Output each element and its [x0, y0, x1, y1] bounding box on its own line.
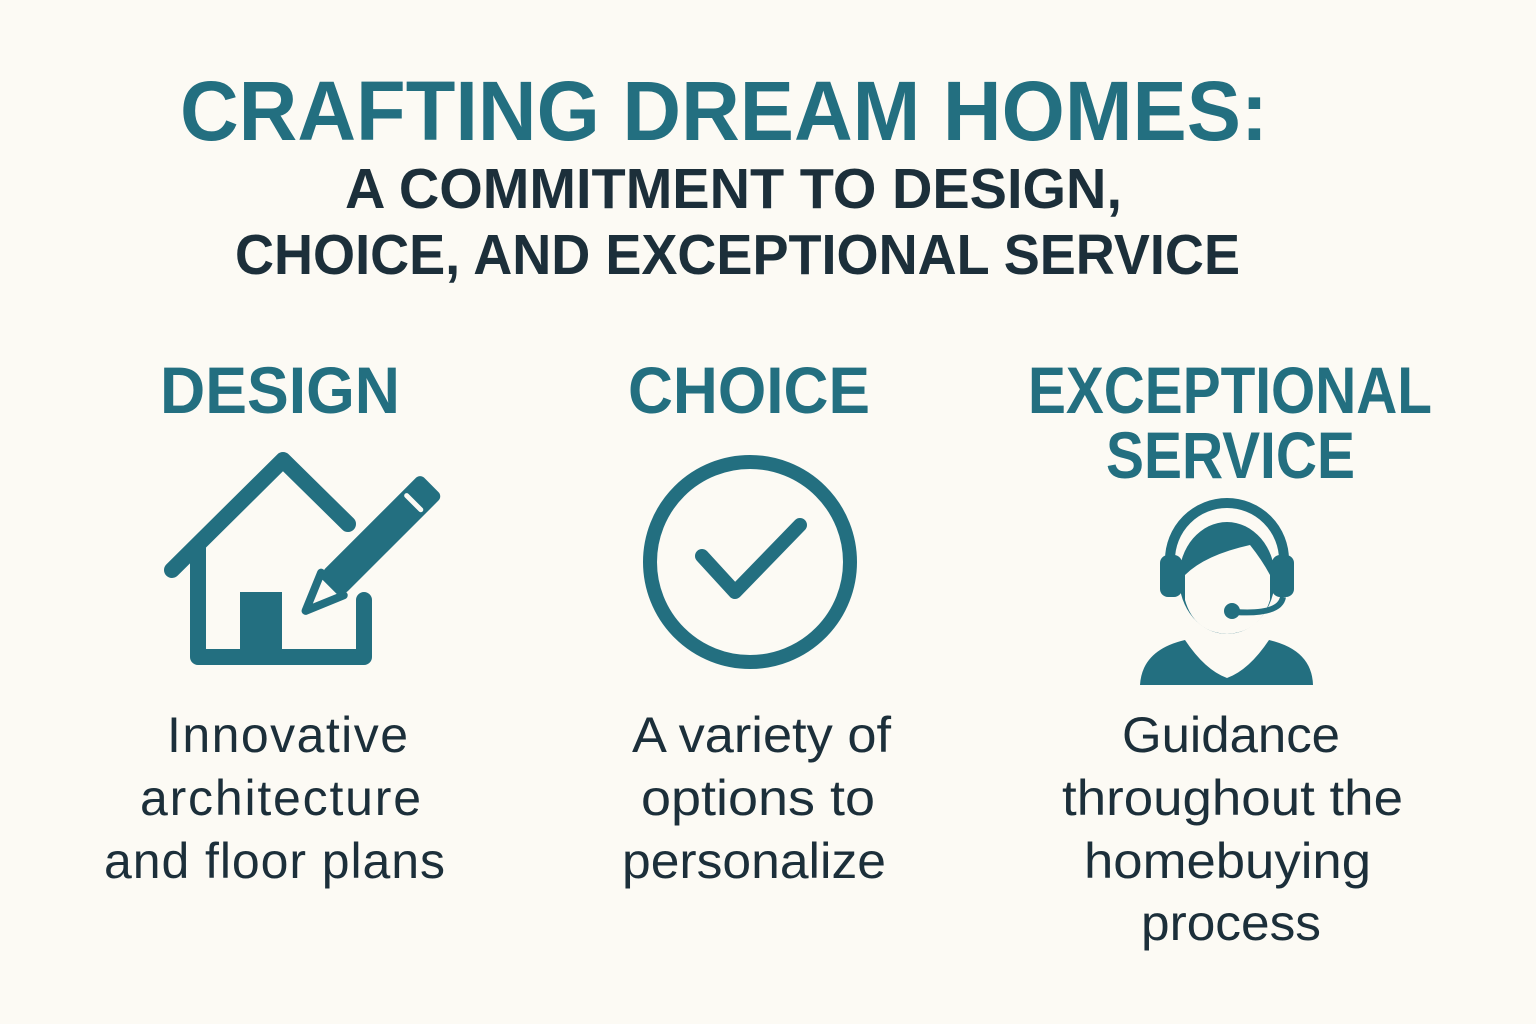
body: design: and floor plans [104, 833, 445, 889]
body: exceptional service: Guidance [1122, 707, 1340, 763]
heading: exceptional service [1028, 353, 1432, 492]
body: choice [622, 707, 891, 889]
body: design: Innovative [167, 707, 408, 763]
subtitle: A COMMITMENT TO DESIGN, [345, 157, 1122, 221]
panel: exceptional service [1028, 353, 1432, 951]
body: exceptional service: throughout the [1062, 770, 1403, 826]
body: choice: options to [641, 770, 875, 826]
body: exceptional service [1062, 707, 1403, 951]
heading: exceptional service: SERVICE [1106, 418, 1355, 492]
body: exceptional service: process [1141, 895, 1321, 951]
panel: design [104, 353, 445, 889]
heading: design: DESIGN [160, 353, 400, 427]
heading: choice: CHOICE [628, 353, 870, 427]
body: choice: personalize [622, 833, 886, 889]
title [180, 64, 1268, 287]
title: CRAFTING DREAM HOMES: [180, 64, 1268, 158]
panel: choice [622, 353, 891, 889]
subtitle [235, 157, 1240, 287]
body: exceptional service: homebuying [1084, 833, 1371, 889]
icon: check circle [650, 462, 850, 662]
body: choice: A variety of [632, 707, 891, 763]
body: design: architecture [140, 770, 421, 826]
icon: house with pencil [172, 460, 443, 657]
body: design [104, 707, 445, 889]
icon: headset person [1140, 503, 1313, 685]
heading: exceptional service: EXCEPTIONAL [1028, 353, 1432, 427]
subtitle: CHOICE, AND EXCEPTIONAL SERVICE [235, 223, 1240, 287]
